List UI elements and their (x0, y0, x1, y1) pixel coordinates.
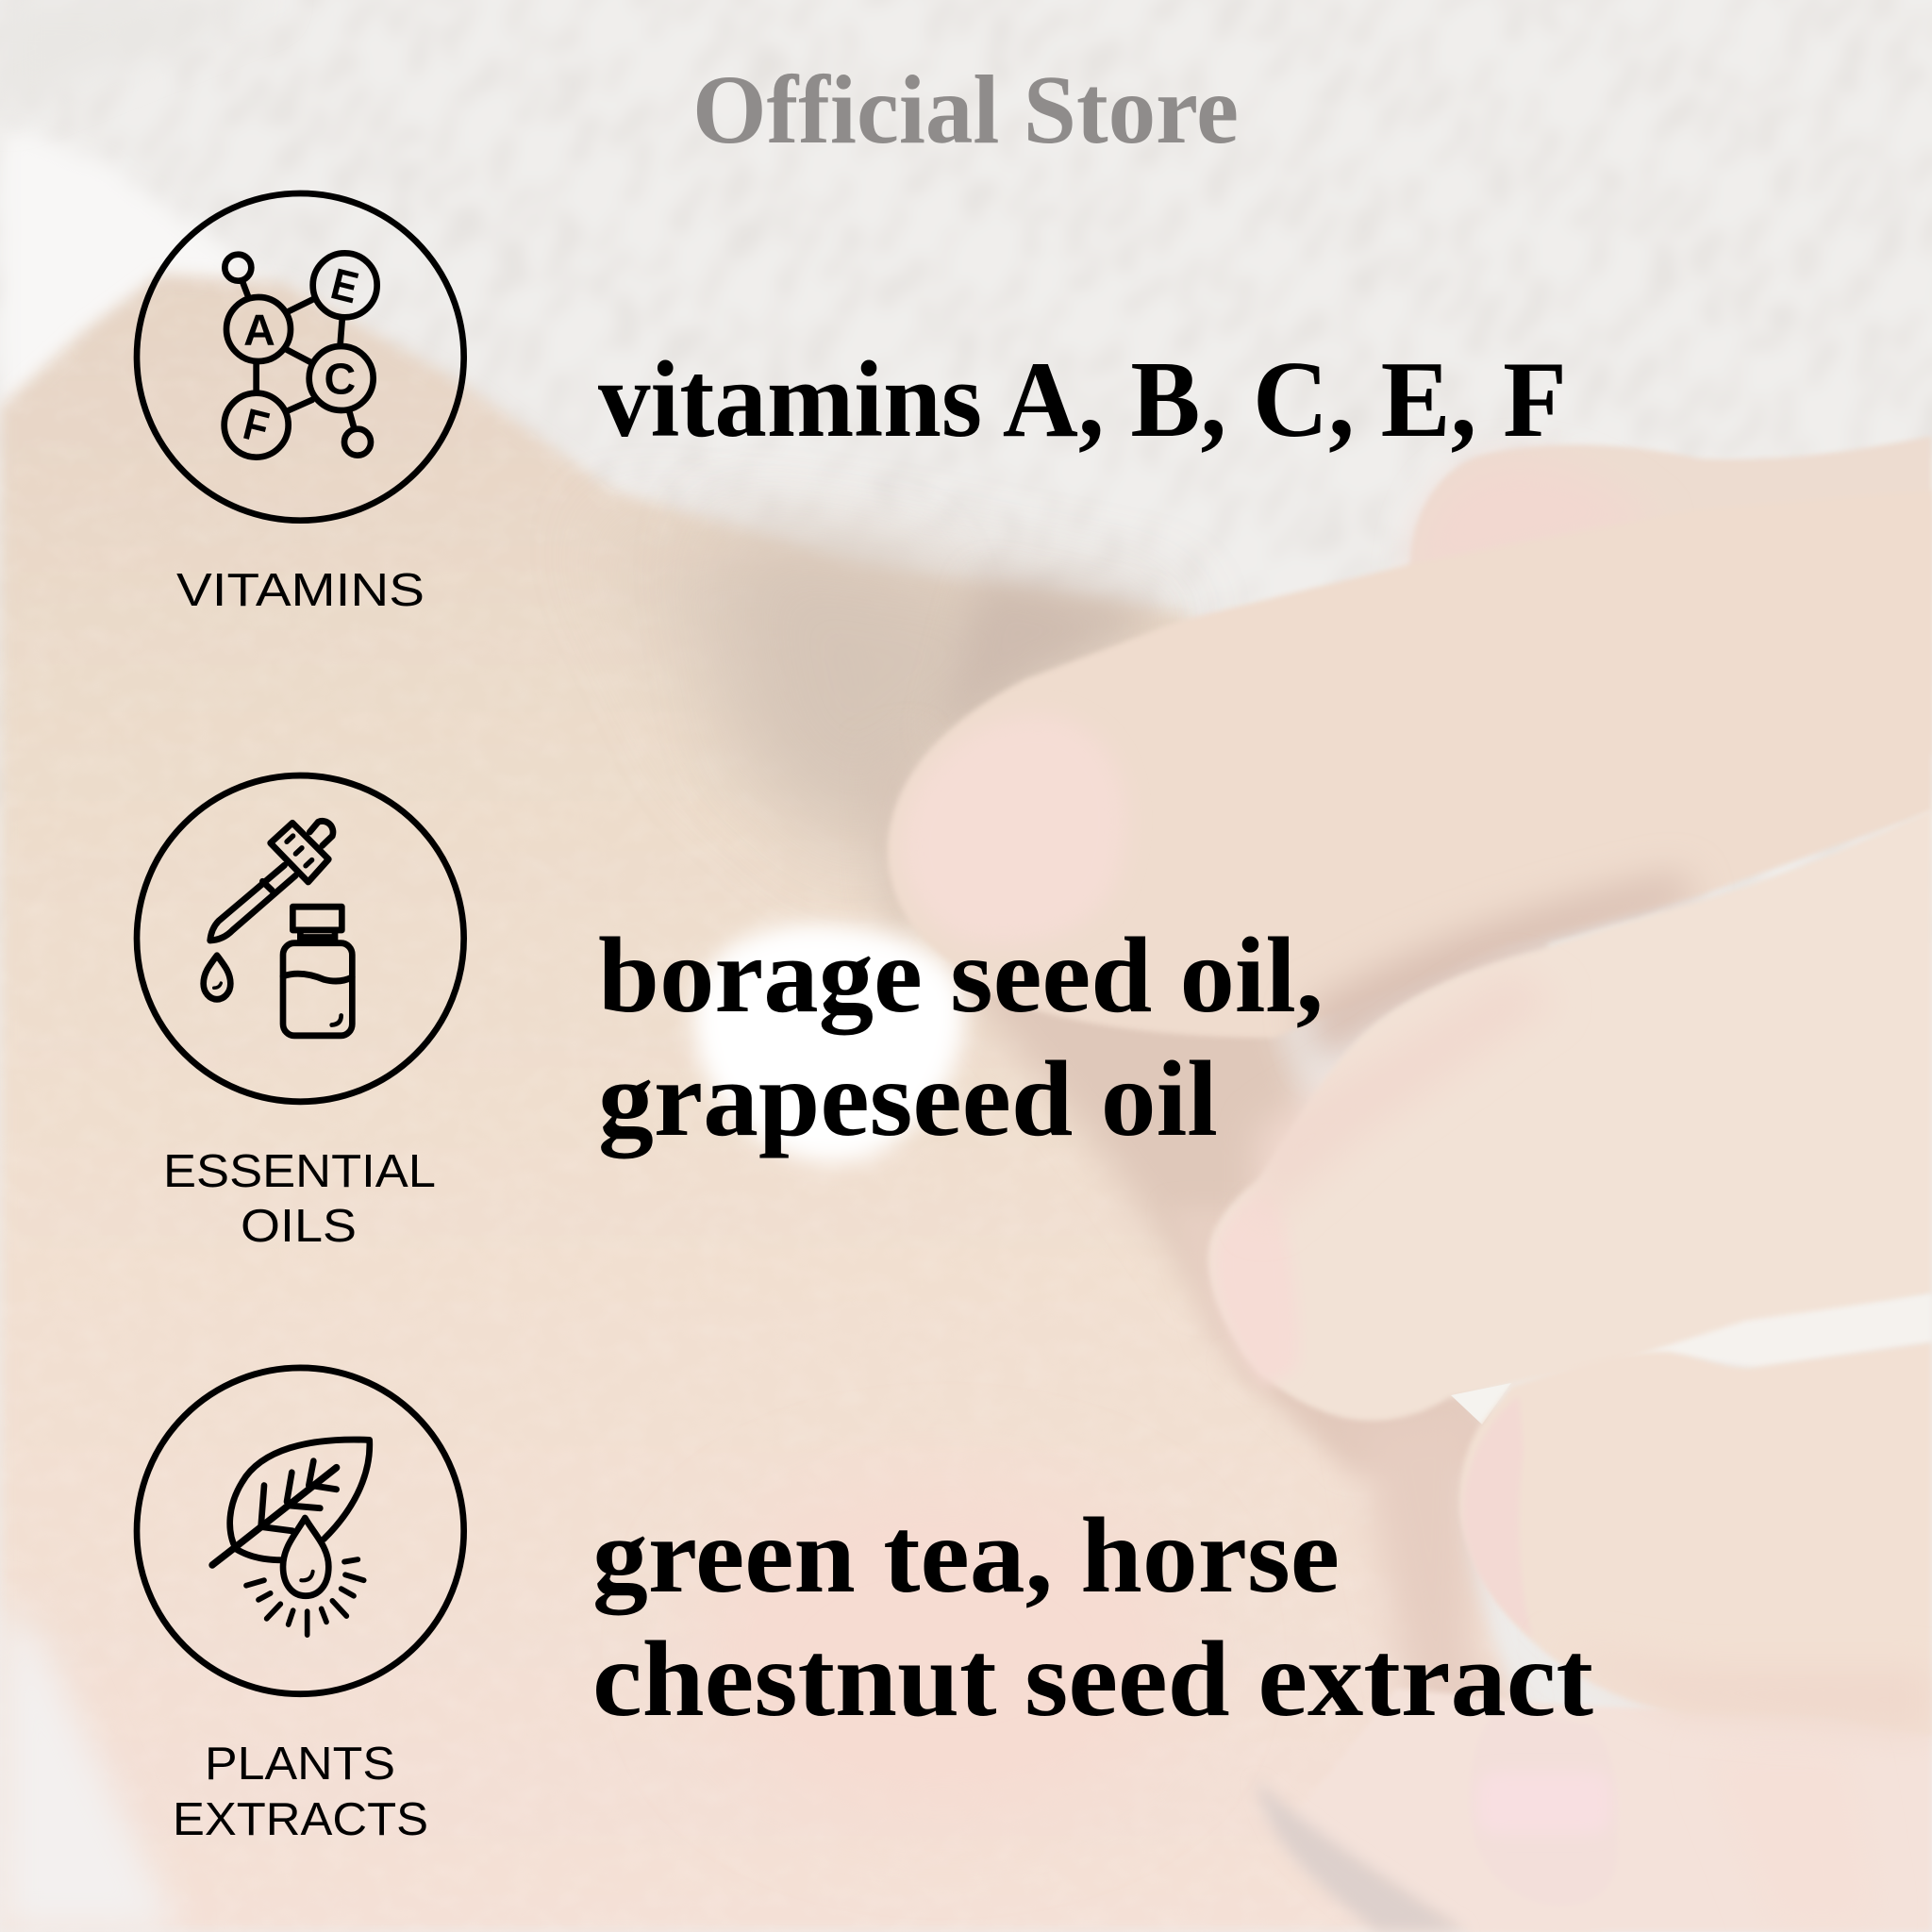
crease between fingers (1256, 1779, 1467, 1932)
thumb (1459, 1342, 1932, 1736)
icon: vitamins molecule: E (326, 258, 363, 313)
label: plants extracts: PLANTS (205, 1739, 395, 1790)
panel: vitamins (137, 193, 464, 616)
icon: dropper and bottle (137, 775, 464, 1102)
index finger (888, 491, 1932, 1038)
icon: vitamins molecule: F (239, 399, 274, 453)
text: plants list: chestnut seed extract (592, 1619, 1593, 1739)
label: plants extracts: EXTRACTS (173, 1794, 428, 1845)
text: oils list (598, 915, 1324, 1158)
text: vitamins list: vitamins A, B, C, E, F (598, 340, 1567, 460)
title: Official Store (692, 56, 1239, 164)
bottom left cuff (0, 1594, 179, 1932)
text: oils list: borage seed oil, (598, 915, 1324, 1035)
back finger (1410, 436, 1932, 755)
cream dollop (693, 924, 964, 1162)
finger shadow (1302, 873, 1698, 1066)
icon: vitamins molecule: C (324, 354, 356, 403)
text: plants list (592, 1495, 1593, 1739)
label: essential oils: OILS (241, 1201, 357, 1252)
text: plants list: green tea, horse (592, 1495, 1340, 1615)
label: plants extracts (173, 1739, 428, 1845)
text: oils list: grapeseed oil (598, 1039, 1218, 1158)
lower finger and nail (1292, 1689, 1932, 1932)
icon: leaf and drop (137, 1368, 464, 1694)
icon: vitamins molecule: A (243, 305, 275, 354)
white gap between fingers (1587, 1294, 1932, 1372)
label: essential oils (163, 1146, 436, 1252)
panel: essential oils (137, 775, 464, 1252)
icon: vitamins molecule (137, 193, 464, 521)
panel: plants extracts (137, 1368, 464, 1845)
middle finger (1208, 809, 1932, 1421)
label: vitamins: VITAMINS (176, 565, 425, 616)
label: essential oils: ESSENTIAL (163, 1146, 436, 1197)
